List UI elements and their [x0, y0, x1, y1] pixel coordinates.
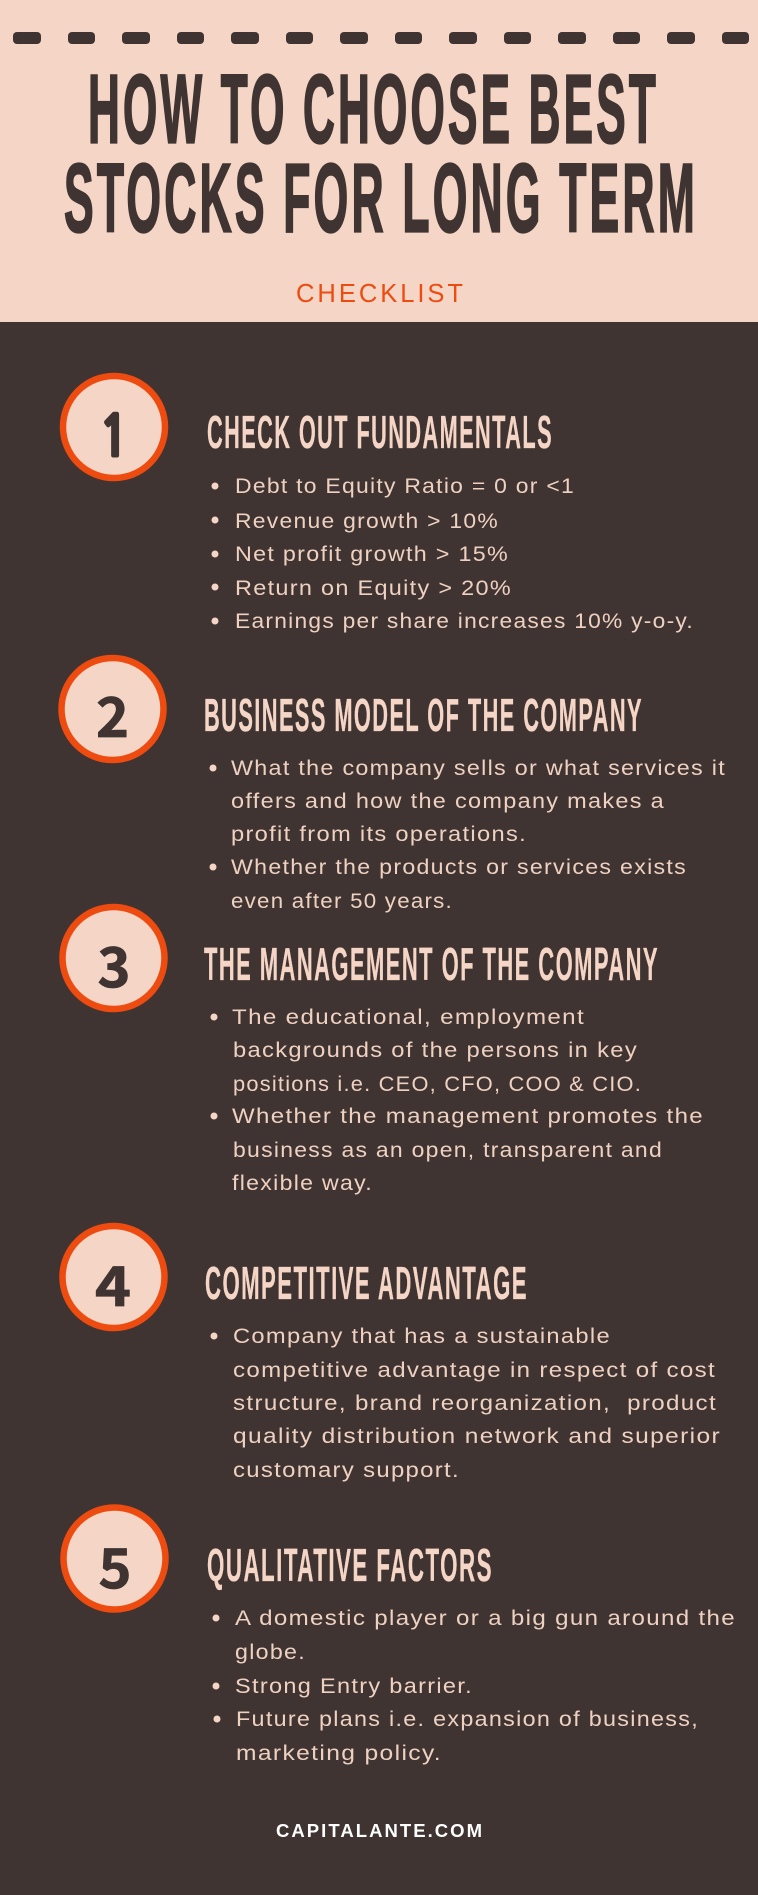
bullet list 4: Company that has a sustainable: [233, 1324, 611, 1348]
bullet list 5: globe.: [235, 1640, 306, 1664]
section 2: business model: [62, 658, 726, 913]
bullet list 4: customary support.: [233, 1458, 460, 1482]
bullet list 2: profit from its operations.: [231, 822, 527, 846]
bullet list 5: Strong Entry barrier.: [235, 1674, 473, 1698]
bullet list 4: competitive advantage in respect of cost: [233, 1358, 716, 1382]
number badge 3: 3: [98, 923, 130, 1003]
number badge 1: 1: [99, 410, 129, 465]
section 3: management: [62, 907, 704, 1195]
bullet list 2: Whether the products or services exists: [231, 855, 687, 879]
section 1: fundamentals: [63, 376, 694, 633]
section 4: competitive advantage: [62, 1226, 721, 1482]
number badge 3: [62, 907, 164, 1009]
bullet list 3: positions i.e. CEO, CFO, COO & CIO.: [233, 1072, 642, 1096]
bullet list 2: offers and how the company makes a: [231, 789, 665, 813]
number badge 5: [64, 1508, 166, 1610]
title: [64, 54, 698, 252]
dashed line: [13, 32, 749, 44]
bullet list 4: quality distribution network and superior: [233, 1424, 721, 1448]
header panel: [0, 0, 758, 322]
bullet list 2: [210, 756, 726, 913]
bullet list 4: structure, brand reorganization, product: [233, 1391, 717, 1415]
footer: website: CAPITALANTE.COM: [276, 1820, 482, 1841]
bullet list 3: The educational, employment: [232, 1005, 585, 1029]
bullet list 3: Whether the management promotes the: [232, 1104, 704, 1128]
number badge 2: [62, 658, 164, 760]
bullet list 2: even after 50 years.: [231, 889, 453, 913]
section 5: qualitative factors: [64, 1508, 736, 1765]
number badge 4: 4: [95, 1242, 131, 1322]
number badge 4: [62, 1226, 164, 1328]
bullet list 3: [210, 1005, 704, 1195]
bullet list 5: A domestic player or a big gun around the: [235, 1606, 736, 1630]
bullet list 5: marketing policy.: [236, 1741, 442, 1765]
bullet list 1: Return on Equity > 20%: [235, 576, 512, 600]
bullet list 1: Net profit growth > 15%: [235, 542, 509, 566]
bullet list 2: What the company sells or what services it: [231, 756, 726, 780]
bullet list 1: [212, 474, 694, 633]
bullet list 3: business as an open, transparent and: [233, 1138, 663, 1162]
bullet list 5: Future plans i.e. expansion of business,: [236, 1707, 699, 1731]
bullet list 1: Revenue growth > 10%: [235, 509, 499, 533]
number badge 1: [63, 376, 165, 478]
bullet list 1: Debt to Equity Ratio = 0 or <1: [235, 474, 575, 498]
bullet list 5: [212, 1606, 736, 1765]
bullet list 1: Earnings per share increases 10% y-o-y.: [235, 609, 694, 633]
number badge 2: 2: [96, 673, 129, 753]
bullet list 3: backgrounds of the persons in key: [233, 1038, 638, 1062]
bullet list 4: [210, 1324, 721, 1482]
bullet list 3: flexible way.: [232, 1171, 373, 1195]
number badge 5: 5: [98, 1524, 132, 1604]
subtitle: checklist: CHECKLIST: [296, 278, 466, 308]
